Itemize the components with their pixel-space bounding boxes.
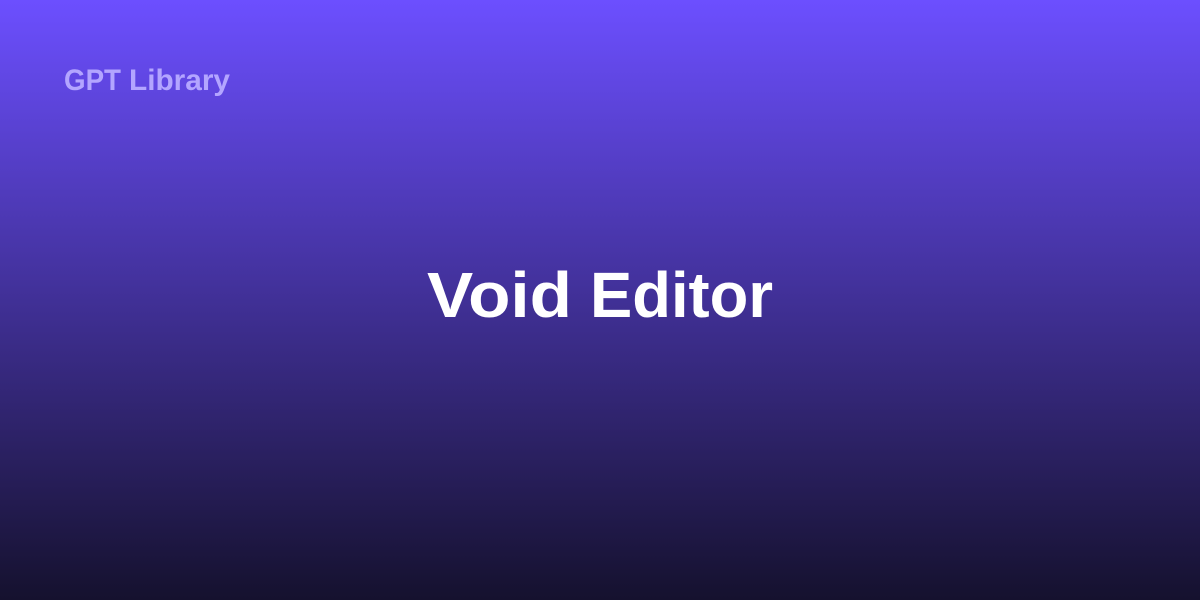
title: Editor <box>590 259 773 331</box>
title <box>427 259 773 331</box>
brand label: Library <box>129 64 230 97</box>
title: Void <box>427 259 572 331</box>
brand label: GPT <box>64 64 121 97</box>
brand label <box>64 64 230 97</box>
